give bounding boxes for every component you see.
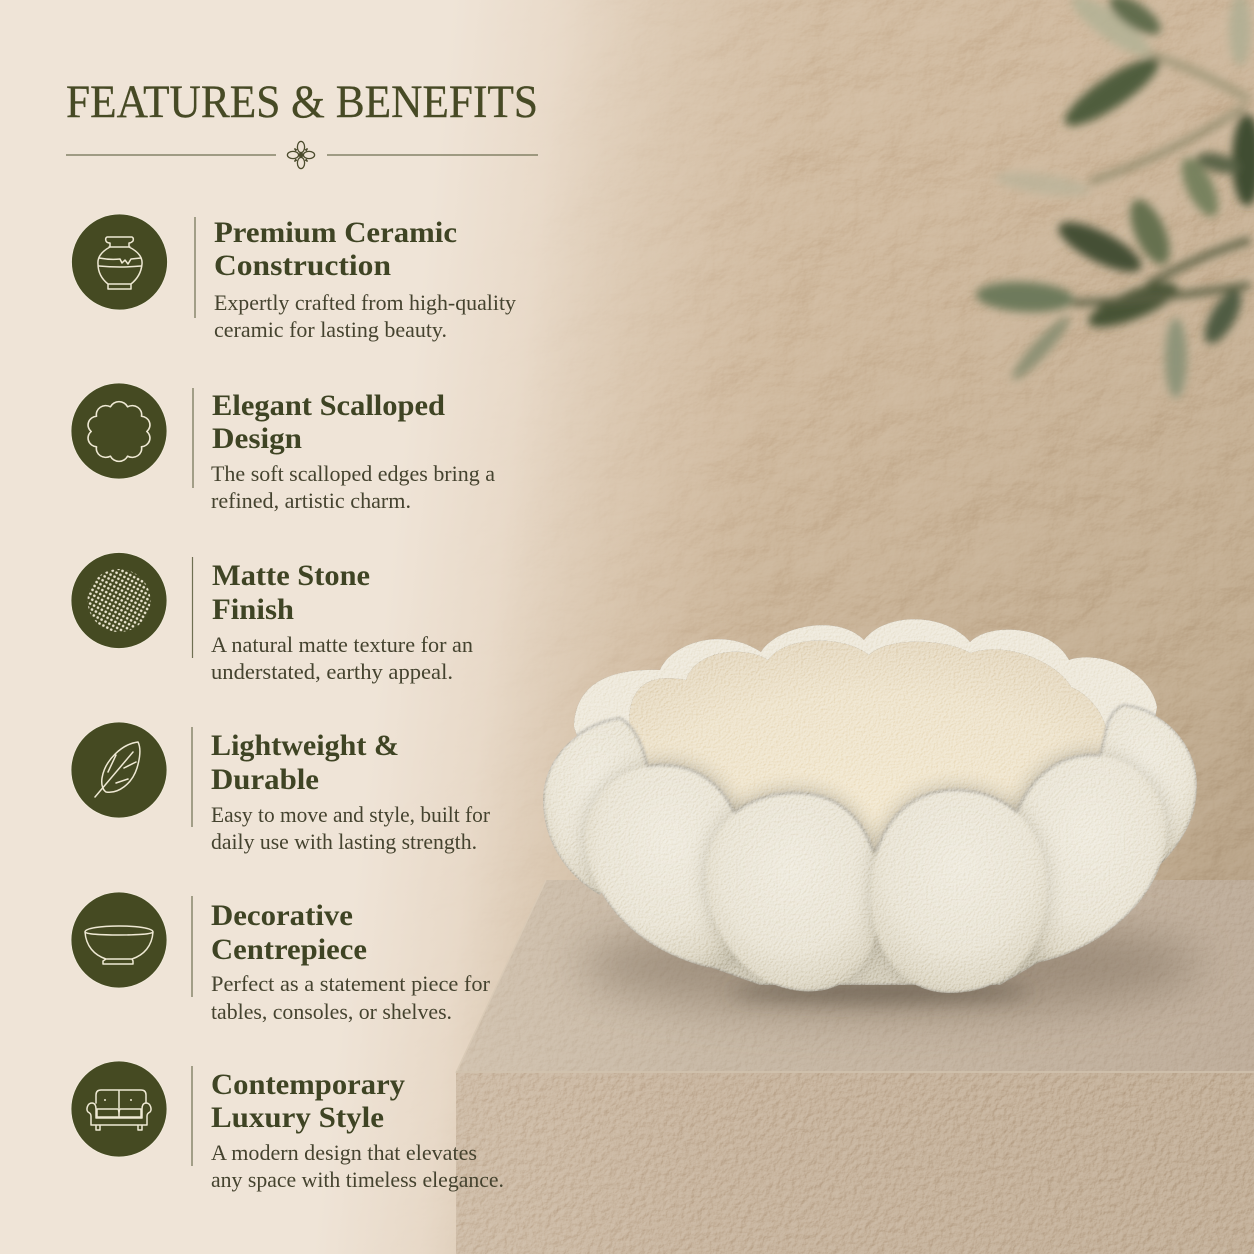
title divider with ornament: [66, 141, 538, 169]
feature: contemporary luxury style: [71, 1061, 504, 1192]
feature: premium ceramic construction: [72, 214, 516, 342]
heading: Finish: [212, 593, 294, 626]
background leaves: [975, 0, 1254, 398]
scalloped ceramic bowl: [543, 619, 1197, 993]
bowl interior: [629, 641, 1107, 880]
divider: [191, 1066, 193, 1166]
description: refined, artistic charm.: [211, 488, 411, 513]
heading: Luxury Style: [211, 1101, 384, 1134]
heading: Elegant Scalloped: [212, 389, 445, 422]
divider: [191, 727, 193, 827]
description: The soft scalloped edges bring a: [211, 461, 495, 486]
icon: sofa: [71, 1061, 167, 1157]
heading: Durable: [211, 763, 319, 796]
description: Easy to move and style, built for: [211, 802, 491, 827]
description: Expertly crafted from high-quality: [214, 290, 516, 315]
description: understated, earthy appeal.: [211, 659, 453, 684]
description: A natural matte texture for an: [211, 632, 473, 657]
bowl lobes: [543, 705, 1197, 993]
description: daily use with lasting strength.: [211, 829, 477, 854]
divider: [192, 557, 194, 658]
icon: speckled stone disc: [71, 552, 167, 648]
heading: Centrepiece: [211, 933, 367, 966]
heading: Premium Ceramic: [214, 216, 457, 249]
feature: elegant scalloped design: [71, 383, 495, 513]
feature: matte stone finish: [71, 552, 473, 684]
description: any space with timeless elegance.: [211, 1167, 504, 1192]
description: ceramic for lasting beauty.: [214, 317, 447, 342]
description: A modern design that elevates: [211, 1140, 477, 1165]
icon: scalloped outline: [71, 383, 167, 479]
heading: Lightweight &: [211, 729, 399, 762]
heading: Matte Stone: [212, 559, 370, 592]
icon: bowl: [71, 892, 167, 988]
description: Perfect as a statement piece for: [211, 971, 491, 996]
heading: Decorative: [211, 899, 353, 932]
divider: [194, 217, 196, 318]
divider: [192, 388, 194, 488]
heading: Construction: [214, 249, 391, 282]
divider: [191, 896, 193, 997]
feature: lightweight and durable: [71, 722, 491, 854]
icon: feather: [71, 722, 167, 818]
stone pedestal: [456, 880, 1254, 1254]
icon: ceramic vase: [72, 214, 168, 310]
heading: Design: [212, 422, 302, 455]
description: tables, consoles, or shelves.: [211, 999, 452, 1024]
title: FEATURES & BENEFITS: [66, 76, 538, 128]
bowl back rim: [574, 619, 1157, 860]
feature: decorative centrepiece: [71, 892, 491, 1024]
heading: Contemporary: [211, 1068, 405, 1101]
